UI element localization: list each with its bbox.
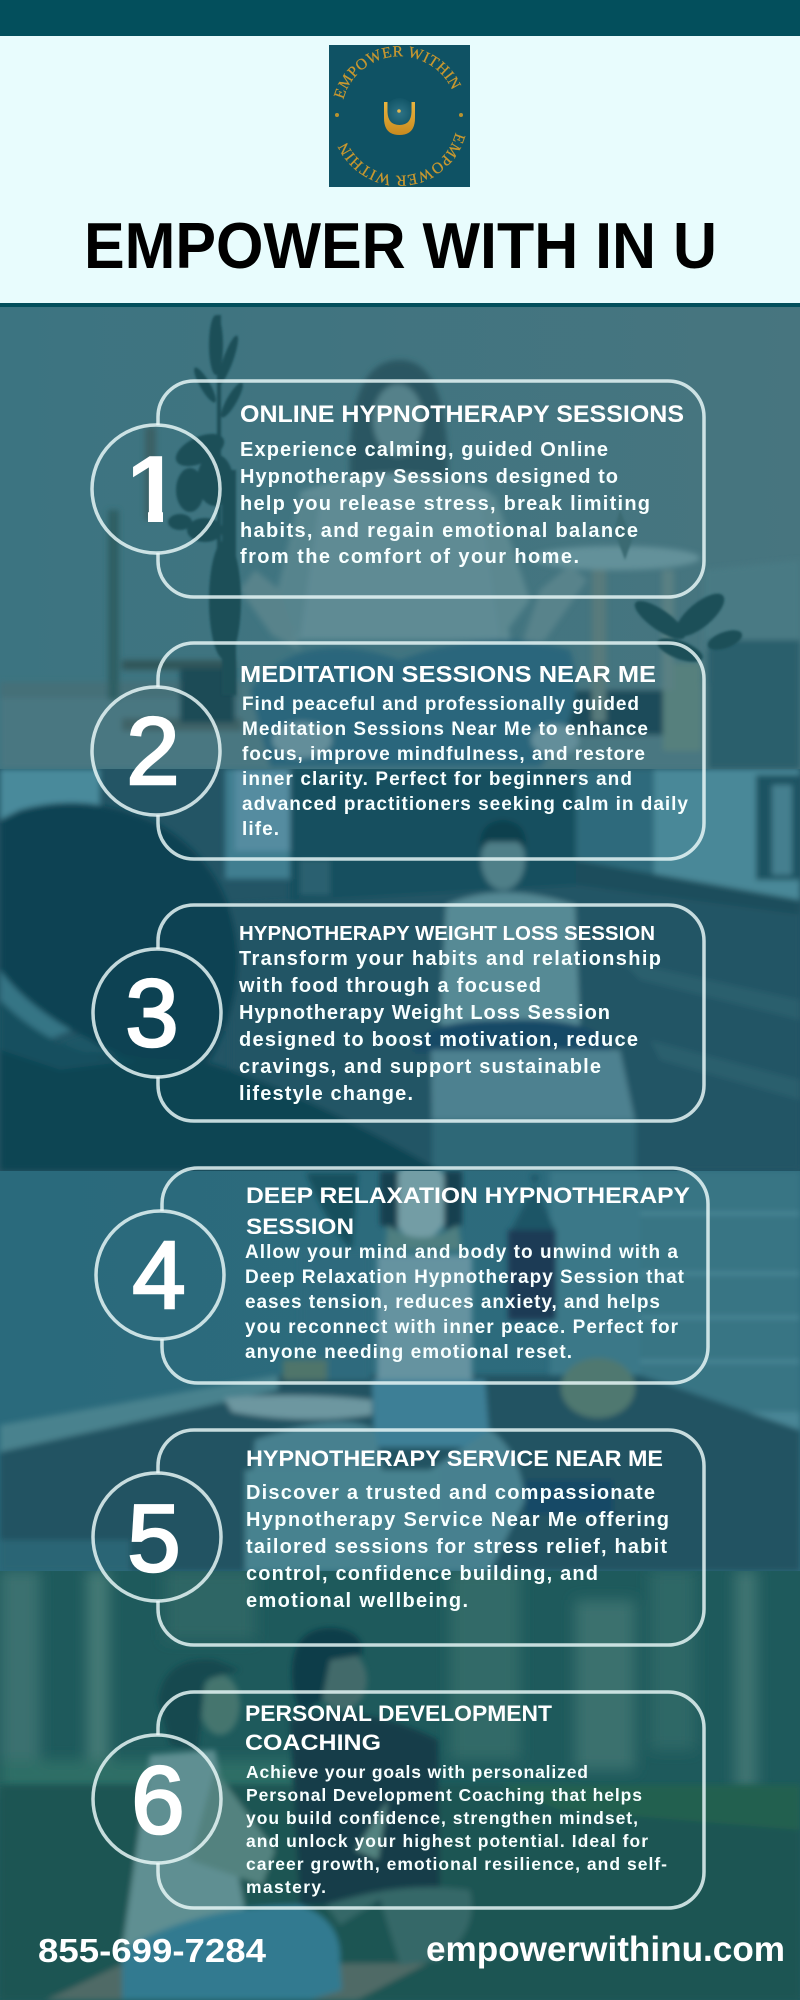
panel outline 4 [162,1168,708,1383]
panel outline 6 [158,1692,704,1908]
panel outline 5 [158,1430,704,1645]
body 1: Hypnotherapy Sessions designed to [240,466,618,488]
body 3: Hypnotherapy Weight Loss Session [239,1002,610,1024]
body 5: emotional wellbeing. [246,1590,468,1612]
heading 1: ONLINE HYPNOTHERAPY SESSIONS [240,401,684,428]
body 1: from the comfort of your home. [240,546,579,568]
body 2: inner clarity. Perfect for beginners and [242,769,632,790]
body 3: Transform your habits and relationship [239,948,661,970]
website: empowerwithinu.com [426,1930,785,1969]
logo: Empower Within emblem [329,45,470,187]
body 3: designed to boost motivation, reduce [239,1029,638,1051]
background photo 3: woman with headphones [0,1160,800,1571]
heading 5: HYPNOTHERAPY SERVICE NEAR ME [246,1446,663,1471]
body 5 [246,1482,669,1612]
body 6 [246,1762,667,1897]
heading 2: MEDITATION SESSIONS NEAR ME [240,661,656,687]
man [290,1713,440,1905]
body 4: Allow your mind and body to unwind with a [245,1242,678,1263]
body 4: eases tension, reduces anxiety, and helps [245,1292,660,1313]
heading 6: PERSONAL DEVELOPMENT [245,1701,553,1726]
woman [122,1750,245,1950]
panel outline 3 [158,905,704,1121]
body 4: anyone needing emotional reset. [245,1342,572,1363]
body 4: Deep Relaxation Hypnotherapy Session that [245,1267,685,1288]
body 5: Discover a trusted and compassionate [246,1482,655,1504]
body 2: Meditation Sessions Near Me to enhance [242,719,648,740]
body 1 [240,439,650,568]
background photo 2: man meditating on wood floor [0,769,800,1171]
woman [393,1171,449,1241]
number badge 2 [92,687,220,815]
body 3 [238,948,661,1105]
number badge 4 [96,1211,224,1339]
number badge 4: 4 [132,1222,186,1329]
body 1: help you release stress, break limiting [240,493,650,515]
background photo 4: couple meditating on grass [0,1570,800,2000]
header divider [0,303,800,307]
panel 3: hypnotherapy weight loss session [93,905,704,1121]
chair [108,510,119,700]
logo: Empower Within emblem: EMPOWER WITHIN [334,46,462,100]
panel 2: meditation sessions near me [92,643,704,859]
top bar [0,0,800,36]
heading 6: COACHING [245,1730,381,1755]
body 4 [245,1242,685,1363]
panel 4: deep relaxation hypnotherapy session [96,1168,708,1383]
body 1: Experience calming, guided Online [240,439,608,461]
number badge 3 [93,949,221,1077]
body 2: Find peaceful and professionally guided [242,694,639,715]
title: EMPOWER WITH IN U [84,209,717,282]
body 2: focus, improve mindfulness, and restore [242,744,645,765]
woman [350,360,448,483]
panel outline 1 [158,381,704,597]
body 3: cravings, and support sustainable [239,1056,601,1078]
table [592,567,606,722]
body 2 [242,694,688,840]
body 1: habits, and regain emotional balance [240,520,638,542]
man [481,830,525,890]
body 6: and unlock your highest potential. Ideal for [246,1831,648,1851]
phone number: 855-699-7284 [38,1932,267,1969]
body 4: you reconnect with inner peace. Perfect for [245,1317,679,1338]
heading 4: SESSION [246,1214,354,1239]
body 6: career growth, emotional resilience, and self- [246,1854,667,1874]
panel 5: hypnotherapy service near me [93,1430,704,1645]
body 3: lifestyle change. [239,1083,413,1105]
heading 4: DEEP RELAXATION HYPNOTHERAPY [246,1183,690,1208]
body 5: tailored sessions for stress relief, habit [246,1536,667,1558]
body 6: you build confidence, strengthen mindset, [246,1808,638,1828]
number badge 6 [93,1735,221,1863]
number badge 6: 6 [131,1747,185,1854]
heading 6 [245,1701,553,1755]
number badge 2: 2 [126,698,180,805]
header band [0,36,800,303]
body 2: advanced practitioners seeking calm in daily [242,794,688,815]
body 5: control, confidence building, and [246,1563,598,1585]
body 3: with food through a focused [238,975,541,997]
logo: Empower Within emblem: EMPOWER WITHIN [338,132,466,186]
number badge 5 [93,1473,221,1601]
foreground head and shoulder [0,803,238,1062]
number badge 5: 5 [127,1485,181,1592]
plants [168,315,745,695]
heading 3: HYPNOTHERAPY WEIGHT LOSS SESSION [239,922,655,945]
panel 6: personal development coaching [93,1692,704,1908]
panel 1: online hypnotherapy sessions [92,381,704,597]
number badge 1: 1 [126,436,180,543]
background photo 1: woman meditating in a room [0,307,800,769]
body 2: life. [242,819,279,840]
number badge 3: 3 [125,960,179,1067]
heading 4 [246,1183,690,1239]
body 5: Hypnotherapy Service Near Me offering [246,1509,669,1531]
body 6: Achieve your goals with personalized [246,1762,588,1782]
number badge 1 [92,425,220,553]
body 6: Personal Development Coaching that helps [246,1785,642,1805]
body 6: mastery. [246,1877,326,1897]
panel outline 2 [158,643,704,859]
mat [46,1963,428,2000]
